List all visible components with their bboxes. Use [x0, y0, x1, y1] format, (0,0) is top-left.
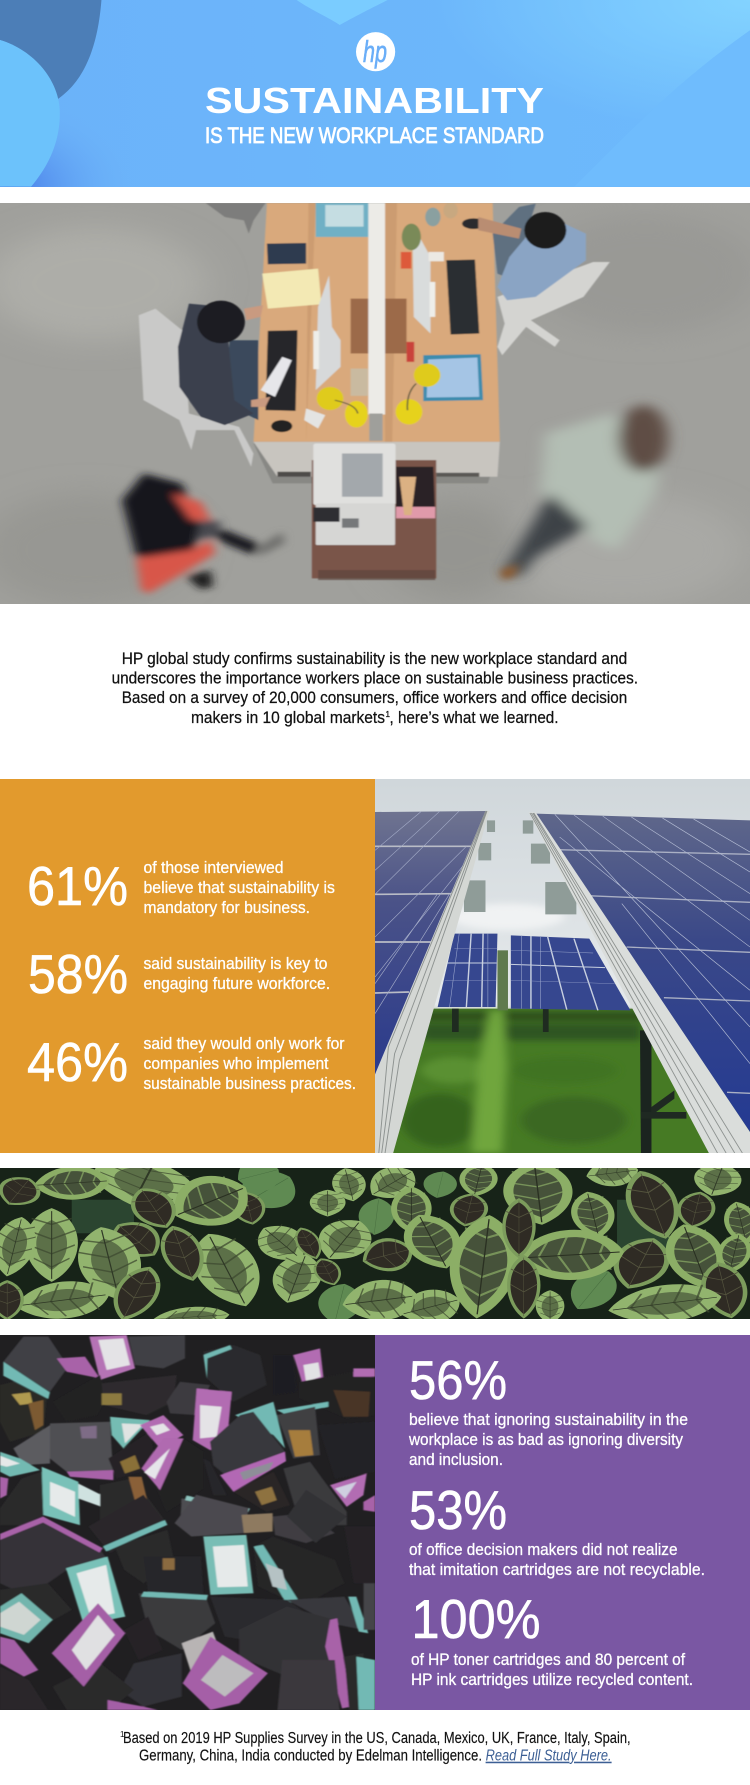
panel: orange statistics	[0, 779, 375, 1153]
far panels	[438, 934, 497, 1007]
text block: study introduction: 1	[386, 710, 390, 719]
text block: study introduction	[112, 649, 638, 727]
stat: 56%	[408, 1349, 688, 1469]
photo: pile of ink cartridges	[0, 1330, 375, 1717]
stat: 56%: 56%	[409, 1349, 507, 1411]
stat: 100%	[411, 1588, 693, 1689]
top half of the pile	[0, 1335, 375, 1525]
stat: 46%: said they would only work for	[144, 1034, 345, 1053]
text block: study introduction: , here’s what we learned.	[390, 708, 558, 727]
left big panel	[375, 811, 486, 1075]
stat: 46%: companies who implement	[144, 1054, 329, 1073]
stat: 53%: 53%	[409, 1479, 507, 1541]
right big panel	[536, 814, 750, 1132]
text block: study introduction: makers in 10 global markets	[191, 708, 385, 727]
text block: study introduction: Based on a survey of 20,000 consumers, office workers and office decision	[122, 688, 627, 707]
subheading: IS THE NEW WORKPLACE STANDARD	[205, 123, 544, 148]
stat: 53%: of office decision makers did not realize	[409, 1540, 678, 1559]
stat: 61%: 61%	[27, 855, 128, 917]
photo: green leaves	[0, 1148, 750, 1330]
photo: overhead office scene	[0, 200, 750, 620]
brackets	[464, 820, 576, 914]
stat: 46%: sustainable business practices.	[144, 1074, 356, 1093]
support	[640, 1030, 651, 1153]
text block: study introduction: HP global study confirms sustainability is the new workplace standard and	[122, 649, 627, 668]
stat: 61%: believe that sustainability is	[144, 878, 335, 897]
text block: study introduction: underscores the importance workers place on sustainable business practices.	[112, 668, 638, 688]
stat: 56%: workplace is as bad as ignoring diversity	[408, 1430, 683, 1449]
stat: 58%: 58%	[28, 943, 128, 1005]
footnote: survey source	[120, 1730, 631, 1765]
stat: 53%: that imitation cartridges are not recyclable.	[409, 1560, 705, 1579]
blurred walkers	[505, 405, 668, 577]
heading: SUSTAINABILITY: SUSTAINABILITY	[205, 80, 544, 121]
stat: 53%	[409, 1479, 705, 1579]
stat: 56%: believe that ignoring sustainability in the	[409, 1410, 688, 1429]
photo: solar panels	[375, 770, 750, 1155]
footnote: survey source: Germany, China, India conducted by Edelman Intelligence.	[139, 1748, 482, 1765]
panel: blue header banner	[0, 0, 750, 187]
panel: purple statistics	[375, 1335, 750, 1710]
footnote: survey source: Read Full Study Here.	[486, 1748, 612, 1765]
right seated person	[497, 262, 610, 355]
stat: 61%	[27, 855, 335, 917]
table with printer	[312, 460, 436, 578]
stat: 58%: engaging future workforce.	[144, 974, 330, 993]
stat: 46%: 46%	[27, 1031, 128, 1093]
stat: 58%: said sustainability is key to	[144, 954, 328, 973]
stat: 100%: HP ink cartridges utilize recycled content.	[411, 1670, 693, 1689]
stat: 61%: mandatory for business.	[144, 898, 310, 917]
icon: HP logo: hp	[363, 34, 387, 69]
stat: 100%: of HP toner cartridges and 80 percent of	[411, 1650, 685, 1669]
stat: 56%: and inclusion.	[409, 1450, 503, 1469]
icon: HP logo	[356, 32, 395, 71]
stat: 58%	[28, 943, 330, 1005]
desk shadows	[254, 443, 500, 483]
footnote: survey source: Based on 2019 HP Supplies Survey in the US, Canada, Mexico, UK, France, Italy, Spain,	[123, 1730, 631, 1747]
bottom half of the pile	[0, 1518, 110, 1597]
stat: 46%	[27, 1031, 356, 1093]
left seated person	[139, 309, 254, 467]
footnote: survey source: 1	[120, 1730, 125, 1739]
stat: 61%: of those interviewed	[144, 858, 284, 877]
stat: 100%: 100%	[412, 1588, 540, 1650]
